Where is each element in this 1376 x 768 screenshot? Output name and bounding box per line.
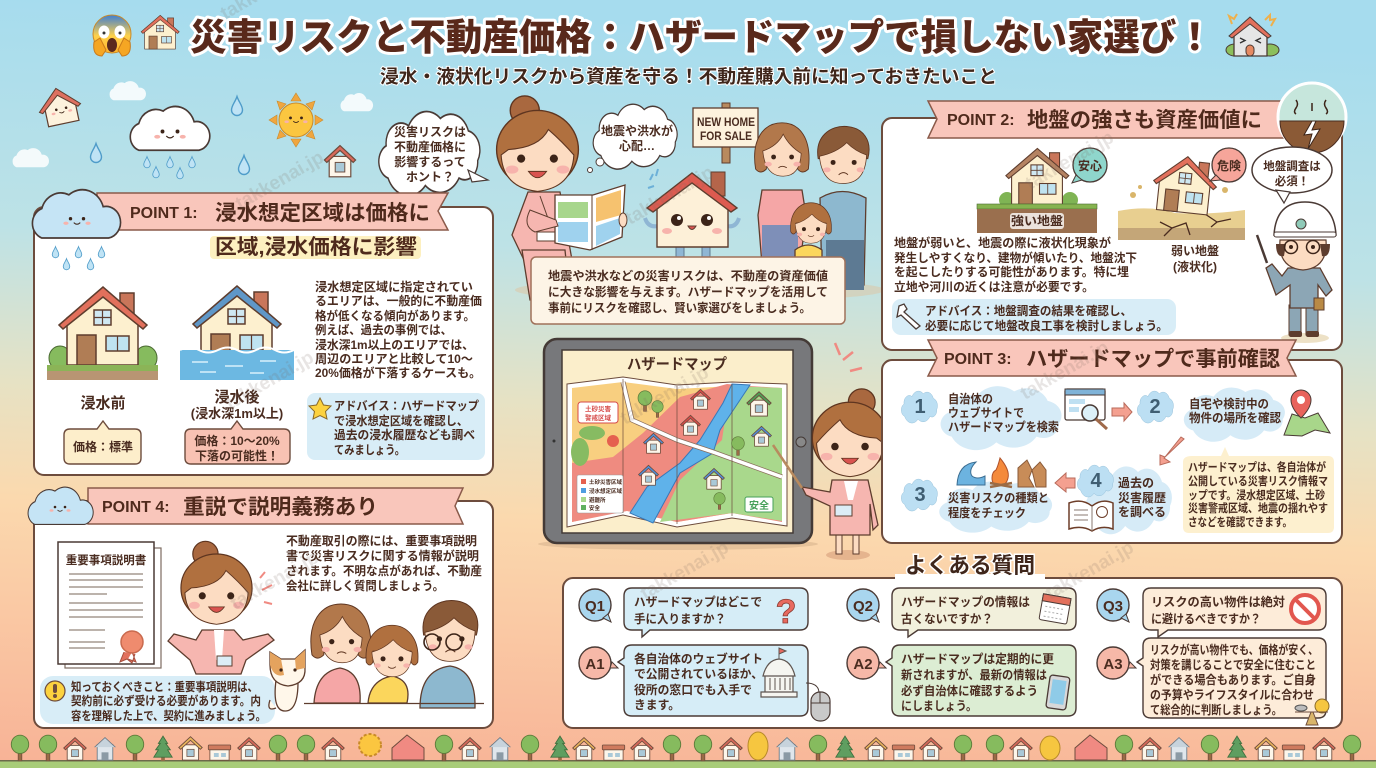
Q2 badge: Q2 — [853, 598, 873, 615]
step 2: 自宅や検討中の — [1189, 396, 1269, 411]
note: hazard map explanation: ップです。浸水想定区域、土砂 — [1188, 488, 1325, 502]
illustration: flooded house — [180, 286, 294, 380]
Q3 bubble — [1143, 588, 1326, 637]
watermark: takkenai.jp — [227, 547, 323, 614]
text box: intro — [531, 257, 845, 324]
icon: prohibition — [1291, 595, 1319, 623]
speech bubble: disaster risk question: 不動産価格に — [394, 139, 466, 154]
A1 bubble: 役所の窓口でも入手で — [634, 682, 752, 697]
icon: mouse — [806, 683, 830, 721]
character: worried mother — [755, 123, 809, 265]
heading text: 災害リスクと不動産価格：ハザードマップで損しない家選び！ — [190, 17, 1213, 58]
text block: liquefaction: を起こしたりする可能性があります。特に埋 — [894, 264, 1129, 279]
step 1: 1 — [914, 396, 926, 418]
text block: explanation: 不動産取引の際には、重要事項説明 — [286, 533, 477, 548]
label: after — [191, 388, 283, 421]
text block: flood area: 20%価格が下落するケースも。 — [315, 365, 481, 380]
icon: smartphone — [1046, 675, 1070, 710]
A2 bubble — [886, 645, 1076, 716]
text box: intro: 事前にリスクを確認し、賢い家選びをしましょう。 — [548, 300, 811, 315]
Q1 badge: Q1 — [585, 598, 605, 615]
Q3 bubble: リスクの高い物件は絶対 — [1151, 594, 1285, 609]
label: before: 浸水前 — [80, 394, 126, 412]
icon: city hall — [761, 648, 797, 697]
icon: shaking house — [1226, 14, 1279, 56]
advice box: hazard map: で浸水想定区域を確認し、 — [334, 413, 468, 428]
map legend: 安全 — [589, 504, 601, 512]
callout: price drop — [185, 421, 290, 464]
illustration: strong ground — [977, 148, 1097, 233]
step 1: 自治体の — [948, 391, 993, 406]
advice box: hazard map: アドバイス：ハザードマップ — [334, 399, 479, 413]
tablet with hazard map — [538, 339, 818, 550]
A1 badge — [579, 647, 618, 679]
icon: exclamation — [45, 681, 65, 701]
step 2: 物件の場所を確認 — [1189, 410, 1281, 425]
note: hazard map explanation: 災害警戒区域、地震の揺れやす — [1188, 501, 1328, 515]
text block: flood area: 浸水深1m以上のエリアでは、 — [315, 337, 474, 352]
heading ribbon: POINT 4: POINT 4: — [102, 499, 170, 516]
icon: cat — [269, 650, 305, 711]
speech bubble: survey required — [1252, 147, 1332, 203]
icon: sun — [269, 93, 323, 147]
Q3 badge: Q3 — [1103, 598, 1123, 615]
text block: flood area: 格が低くなる傾向があります。 — [315, 308, 475, 323]
panel: POINT 1 — [32, 190, 493, 475]
A1 bubble: 各自治体のウェブサイト — [634, 651, 763, 666]
text box: intro: に大きな影響を与えます。ハザードマップを活用して — [548, 284, 828, 299]
Q3 bubble: に避けるべきですか？ — [1151, 611, 1261, 626]
label: after: 浸水後 — [214, 388, 260, 406]
A3 bubble: 対策を講じることで安全に住むこと — [1150, 657, 1316, 672]
icon: scale and coin — [1295, 699, 1329, 725]
sky decorations — [13, 81, 488, 196]
thought bubble: worried: 地震や洪水が — [601, 123, 673, 138]
note box: things to know — [40, 676, 275, 724]
watermark: takkenai.jp — [617, 362, 713, 429]
badge: danger: 危険 — [1217, 158, 1241, 173]
callout: price drop: 下落の可能性！ — [195, 448, 279, 463]
A3 bubble: ができる場合もあります。ご自身 — [1150, 672, 1316, 687]
text block: flood area: 浸水想定区域に指定されてい — [315, 279, 473, 294]
watermark: takkenai.jp — [637, 537, 733, 604]
text block: explanation: 書で災害リスクに関する情報が説明 — [286, 548, 479, 563]
A3 bubble: の予算やライフスタイルに合わせ — [1150, 687, 1314, 702]
panel: POINT 3 — [882, 340, 1342, 543]
map sign: landslide warning: 土砂災害 — [585, 404, 612, 413]
arrow: step 4 to 3 — [1055, 473, 1075, 492]
map label: safe — [745, 497, 773, 512]
heading ribbon: POINT 3: POINT 3: — [944, 351, 1012, 368]
A3 bubble: て総合的に判断しましょう。 — [1150, 702, 1282, 717]
raindrops — [90, 96, 250, 179]
text block: flood area: 周辺のエリアと比較して10〜 — [315, 351, 473, 366]
A2 bubble: 必ず自治体に確認するよう — [901, 683, 1038, 698]
label: weak ground — [1171, 243, 1219, 274]
heading ribbon: POINT 1: 浸水想定区域は価格に — [215, 202, 430, 225]
A1 bubble: きます。 — [634, 698, 680, 712]
character: worried father — [818, 126, 869, 290]
step 3: 災害リスクの種類と — [948, 490, 1049, 505]
map legend: 浸水想定区域 — [589, 487, 623, 495]
illustration: weak ground — [1118, 153, 1245, 240]
icon: scared face — [93, 15, 131, 56]
speech bubble: disaster risk question: ホント？ — [406, 170, 454, 184]
note: hazard map explanation: さなどを確認できます。 — [1188, 515, 1292, 529]
icon: star — [309, 398, 331, 419]
heading ribbon: POINT 4 — [88, 488, 463, 524]
houses and trees — [11, 732, 1361, 761]
text block: explanation: されます。不明な点があれば、不動産 — [286, 563, 482, 578]
icon: calendar — [1039, 594, 1071, 624]
sign: new home for sale: NEW HOME — [697, 115, 755, 129]
icon: small red roof house — [324, 146, 356, 177]
label: after: (浸水深1m以上) — [191, 406, 283, 421]
speech bubble: disaster risk question: 影響するって — [394, 154, 466, 169]
step 3: 3 — [914, 484, 926, 506]
A2 badge: A2 — [853, 656, 873, 673]
thought bubble: worried — [588, 104, 677, 172]
text block: liquefaction: 地盤が弱いと、地震の際に液状化現象が — [894, 235, 1111, 250]
heading ribbon: POINT 3 — [928, 340, 1296, 376]
FAQ heading: よくある質問 — [905, 553, 1035, 578]
sign: new home for sale: FOR SALE — [700, 129, 752, 143]
icon: tilted small house — [35, 84, 84, 128]
text block: flood area — [315, 279, 482, 380]
hazard map — [567, 377, 787, 527]
step 2: 2 — [1149, 396, 1161, 418]
illustration: important document: 重要事項説明書 — [66, 553, 146, 567]
watermark: takkenai.jp — [232, 147, 328, 214]
step 1 — [901, 386, 1107, 450]
heading ribbon: POINT 3: ハザードマップで事前確認 — [1026, 347, 1280, 371]
Q2 bubble — [892, 588, 1076, 637]
icon: smiling cloud — [130, 106, 210, 150]
sign: new home for sale — [693, 103, 758, 163]
thought bubble: worried: 心配… — [619, 138, 655, 153]
text block: liquefaction: 立地や河川の近くは注意が必要です。 — [894, 279, 1094, 294]
watermark: takkenai.jp — [1022, 127, 1118, 194]
text block: liquefaction: 発生しやすくなり、建物が傾いたり、地盤沈下 — [894, 250, 1137, 265]
Q1 badge — [579, 589, 611, 622]
watermark: takkenai.jp — [622, 162, 718, 229]
step 1: ウェブサイトで — [948, 405, 1024, 420]
illustration: house before flood — [47, 287, 158, 380]
icon: browser search — [1065, 389, 1107, 429]
heading ribbon: POINT 1 — [97, 193, 448, 230]
note: hazard map explanation: 公開している災害リスク情報マ — [1188, 474, 1328, 488]
map title: ハザードマップ — [627, 356, 727, 373]
icon: question mark: ? — [776, 593, 796, 631]
title — [93, 14, 1279, 58]
icon: wrench — [897, 304, 920, 329]
label: weak ground: 弱い地盤 — [1171, 243, 1219, 258]
speech bubble: survey required: 必須！ — [1275, 174, 1309, 188]
map sign: landslide warning — [578, 402, 618, 423]
text block: explanation — [286, 533, 482, 593]
map legend — [577, 475, 623, 513]
subheading highlight: 区域,浸水価格に影響 — [215, 236, 417, 259]
step 4: 4 — [1090, 470, 1102, 492]
callout: standard price: 価格：標準 — [73, 439, 133, 454]
note: hazard map explanation — [1183, 447, 1334, 533]
advice box: hazard map: 過去の浸水履歴なども調べ — [334, 427, 475, 442]
center illustration: agent and worried family — [497, 96, 885, 324]
step 4: を調べる — [1118, 505, 1166, 519]
Q1 bubble: 手に入りますか？ — [634, 611, 726, 626]
character: engineer — [1257, 202, 1336, 343]
A1 bubble — [618, 645, 830, 721]
arrow: step 1 to 2 — [1112, 403, 1132, 421]
illustration: family listening — [304, 601, 484, 708]
ground shadow — [515, 278, 885, 302]
arrow: step 2 to 4 — [1160, 437, 1184, 465]
speech bubble: disaster risk question: 災害リスクは — [394, 124, 466, 139]
character: agent explaining — [168, 541, 274, 674]
small background clouds — [13, 81, 373, 167]
Q1 bubble — [624, 588, 808, 637]
text block: flood area: るエリアは、一般的に不動産価 — [315, 293, 482, 308]
advice box: hazard map: てみましょう。 — [334, 443, 405, 457]
A3 badge: A3 — [1103, 656, 1123, 673]
step 3: 程度をチェック — [948, 505, 1026, 520]
advice box: ground survey: アドバイス：地盤調査の結果を確認し、 — [925, 303, 1132, 318]
character: presenter with pointer — [773, 343, 888, 560]
character: house mascot — [645, 169, 739, 259]
advice box: ground survey: 必要に応じて地盤改良工事を検討しましょう。 — [925, 318, 1168, 333]
step 4 — [1069, 465, 1172, 534]
watermark: takkenai.jp — [1017, 337, 1113, 404]
text block: flood area: 例えば、過去の事例では、 — [315, 322, 452, 337]
Q2 bubble: ハザードマップの情報は — [901, 594, 1030, 609]
A3 bubble — [1137, 638, 1329, 725]
illustration: strong ground: 強い地盤 — [1011, 213, 1063, 228]
FAQ section — [563, 553, 1342, 728]
heading ribbon: POINT 2: POINT 2: — [947, 112, 1015, 129]
A1 bubble: で公開されているほか、 — [634, 667, 763, 681]
text block: liquefaction — [894, 235, 1137, 294]
icon: smiling cloud — [28, 487, 93, 524]
step 4: 過去の — [1118, 475, 1154, 490]
icon: map pin — [1284, 390, 1330, 436]
heading ribbon: POINT 1: POINT 1: — [130, 205, 198, 222]
watermark: takkenai.jp — [222, 347, 318, 414]
pointer — [773, 445, 802, 488]
callout: price drop: 価格：10〜20% — [194, 433, 280, 448]
advice box: hazard map — [307, 393, 485, 460]
label: weak ground: (液状化) — [1173, 259, 1217, 274]
Q3 badge — [1097, 589, 1129, 622]
icons: wave, fire, collapsed house — [957, 458, 1046, 487]
step 1: ハザードマップを検索 — [948, 419, 1059, 434]
Q2 badge — [847, 589, 879, 622]
advice box: ground survey — [892, 299, 1176, 335]
step 3 — [901, 458, 1052, 533]
speech bubble: disaster risk question — [379, 112, 488, 196]
illustration: important document — [58, 542, 161, 668]
map sign: landslide warning: 警戒区域 — [585, 413, 612, 422]
speech bubble: survey required: 地盤調査は — [1263, 159, 1321, 173]
A1 badge: A1 — [585, 656, 605, 673]
panel: POINT 2 — [882, 83, 1346, 350]
note box: things to know: 容を理解した上で、契約に進みましょう。 — [71, 708, 266, 723]
icon: earthquake circle — [1278, 83, 1346, 153]
badge: safe — [1072, 148, 1107, 183]
note: hazard map explanation: ハザードマップは、各自治体が — [1188, 460, 1326, 474]
character: agent with brochure — [497, 96, 627, 300]
badge: safe: 安心 — [1078, 158, 1102, 173]
panel: POINT 4 — [28, 487, 493, 728]
map legend: 土砂災害区域 — [589, 478, 623, 486]
icon: house — [141, 15, 179, 49]
bottom town strip — [0, 732, 1376, 768]
step 2 — [1137, 388, 1330, 442]
note box: things to know: 知っておくべきこと：重要事項説明は、 — [71, 679, 258, 694]
A3 badge — [1097, 647, 1136, 679]
Q2 bubble: 古くないですか？ — [901, 611, 993, 626]
note box: things to know: 契約前に必ず受ける必要があります。内 — [71, 693, 261, 708]
map legend: 避難所 — [589, 496, 606, 504]
A2 bubble: 新されますが、最新の情報は — [901, 667, 1047, 682]
watermark: takkenai.jp — [1042, 537, 1138, 604]
text block: explanation: 会社に詳しく質問しましょう。 — [286, 578, 444, 593]
Q1 bubble: ハザードマップはどこで — [634, 594, 762, 609]
map label: safe: 安全 — [749, 499, 769, 512]
badge: danger — [1210, 148, 1246, 182]
A2 bubble: ハザードマップは定期的に更 — [901, 651, 1054, 666]
ground — [0, 761, 1376, 768]
text box: intro: 地震や洪水などの災害リスクは、不動産の資産価値 — [548, 268, 828, 283]
heading ribbon: POINT 2: 地盤の強さも資産価値に — [1027, 109, 1262, 132]
step 4: 災害履歴 — [1118, 490, 1166, 505]
heading ribbon: POINT 4: 重説で説明義務あり — [183, 496, 378, 519]
icon: book — [1069, 501, 1113, 531]
heading ribbon: POINT 2 — [928, 101, 1290, 138]
A2 bubble: にしましょう。 — [901, 699, 977, 713]
callout: standard price — [64, 421, 141, 464]
A2 badge — [847, 647, 886, 679]
watermark — [217, 0, 1138, 614]
A3 bubble: リスクが高い物件でも、価格が安く、 — [1150, 642, 1318, 657]
icon: rain cloud — [32, 190, 121, 270]
character: child — [791, 203, 831, 262]
subtitle: 浸水・液状化リスクから資産を守る！不動産購入前に知っておきたいこと — [380, 66, 997, 87]
